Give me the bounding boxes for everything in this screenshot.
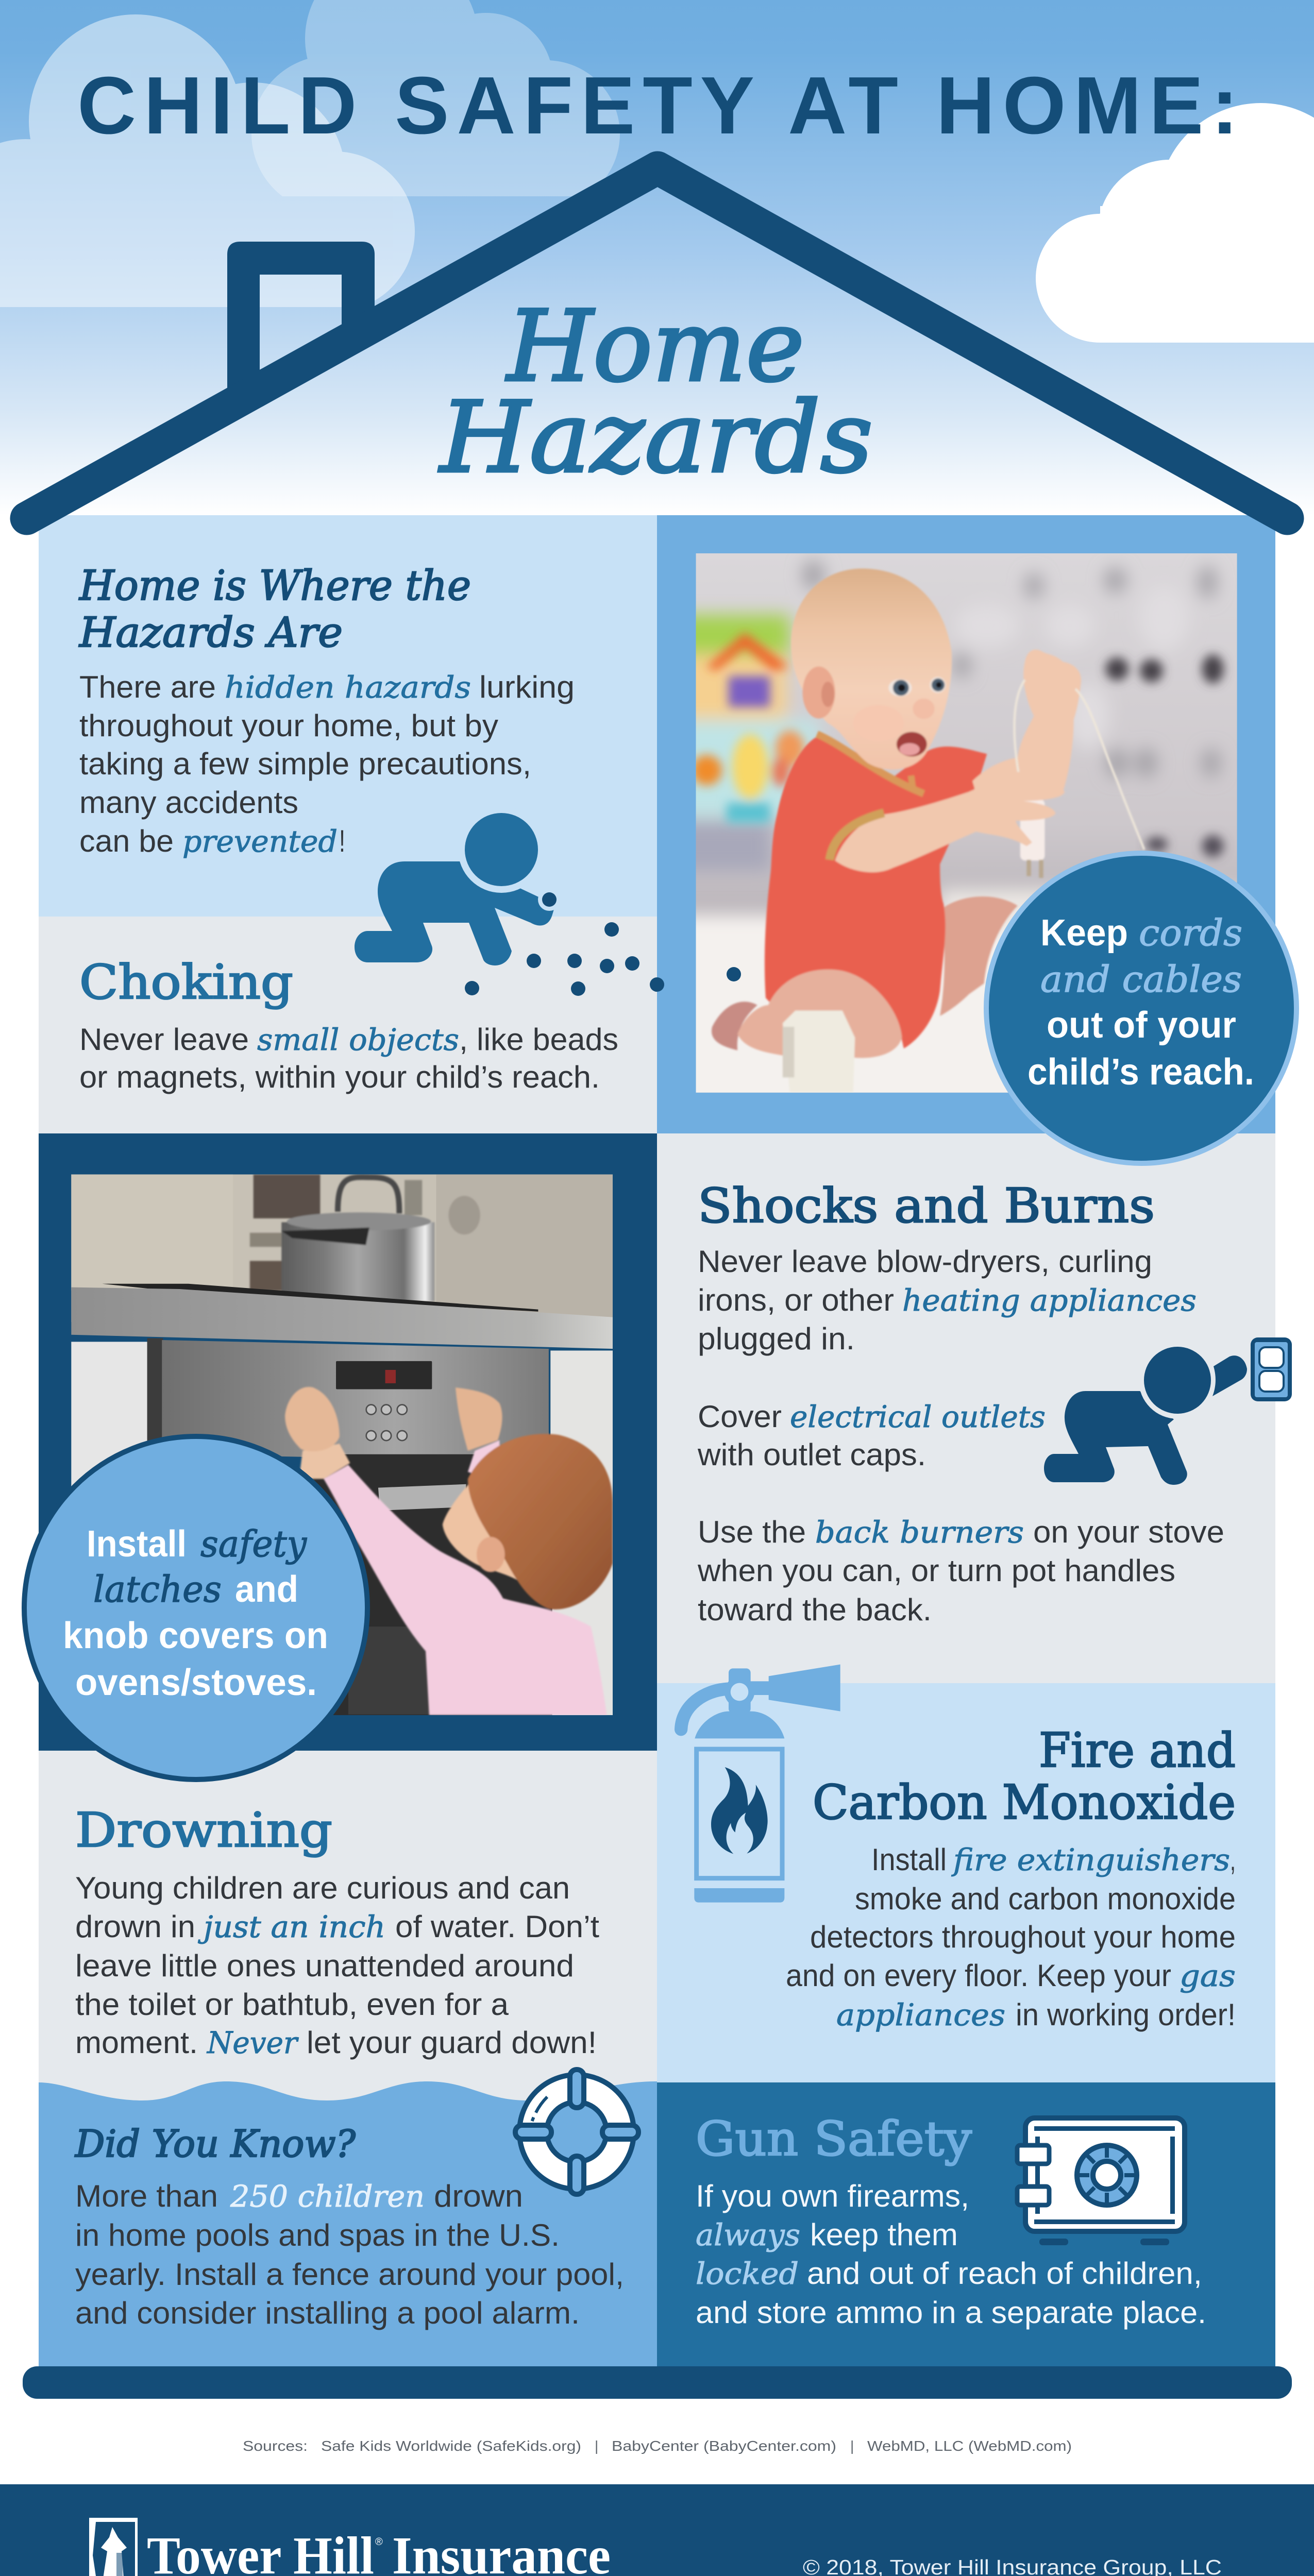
shocks body: plugged in. xyxy=(698,1321,855,1356)
choking heading: Choking xyxy=(79,955,293,1010)
shocks and burns text block xyxy=(697,1178,1224,1627)
shocks body: toward the back. xyxy=(698,1592,932,1627)
callout: safety latches: latches xyxy=(93,1568,222,1611)
gun safety text block xyxy=(696,2111,1206,2330)
fire body: , xyxy=(1230,1842,1236,1877)
fire text block xyxy=(786,1723,1236,2032)
callout: safety latches: knob covers on xyxy=(63,1615,328,1656)
choking body: or magnets, within your child’s reach. xyxy=(79,1060,600,1094)
drowning body: just an inch xyxy=(198,1909,385,1944)
did you know body: yearly. Install a fence around your pool, xyxy=(75,2257,624,2292)
did you know heading: Did You Know? xyxy=(74,2122,356,2165)
shocks body xyxy=(697,1244,1224,1627)
shocks body: heating appliances xyxy=(902,1283,1197,1318)
fire body: detectors throughout your home xyxy=(810,1920,1236,1954)
sources: WebMD, LLC (WebMD.com) xyxy=(867,2438,1072,2454)
fire body: in working order! xyxy=(1016,1997,1236,2032)
gun safety body xyxy=(696,2179,1206,2330)
choking body: small objects xyxy=(257,1022,459,1057)
photo: child at oven xyxy=(71,1175,613,1716)
callout: keep cords xyxy=(986,853,1296,1163)
gun safety body: locked xyxy=(696,2256,799,2291)
sources: | xyxy=(595,2438,598,2454)
logo: tower hill insurance xyxy=(89,2518,611,2576)
cloud: back left xyxy=(251,0,620,212)
callout: keep cords: child’s reach. xyxy=(1027,1052,1254,1093)
panel: drowning xyxy=(39,1751,657,2111)
intro text block xyxy=(78,562,575,859)
shocks body: when you can, or turn pot handles xyxy=(697,1553,1175,1588)
drowning heading: Drowning xyxy=(75,1803,332,1858)
did you know body: and consider installing a pool alarm. xyxy=(75,2296,580,2330)
drowning body: Young children are curious and can xyxy=(75,1871,570,1905)
fire body xyxy=(786,1842,1236,2032)
shocks body: Use the xyxy=(698,1515,806,1549)
gun safety body: and store ammo in a separate place. xyxy=(696,2295,1206,2330)
did you know body: 250 children xyxy=(230,2179,425,2214)
icon: safe xyxy=(1017,2118,1185,2245)
did you know body xyxy=(75,2179,624,2330)
footer band xyxy=(0,2484,1314,2576)
panel: shocks and burns xyxy=(657,1133,1275,1683)
intro body xyxy=(79,670,575,859)
did you know text block xyxy=(74,2122,624,2330)
drowning body: let your guard down! xyxy=(307,2025,597,2060)
fire heading xyxy=(813,1723,1236,1830)
sources xyxy=(243,2438,1072,2454)
gun safety body: always xyxy=(696,2217,800,2252)
shocks heading: Shocks and Burns xyxy=(698,1178,1155,1233)
intro body: can be xyxy=(79,824,174,858)
shocks body: Never leave blow-dryers, curling xyxy=(698,1244,1152,1279)
shocks body: Cover xyxy=(698,1399,782,1434)
panel: oven photo backing xyxy=(39,1133,657,1751)
drowning body: leave little ones unattended around xyxy=(75,1948,574,1983)
callout: safety latches: safety xyxy=(200,1523,307,1565)
fire body: smoke and carbon monoxide xyxy=(855,1882,1236,1916)
callout: keep cords: Keep xyxy=(1040,912,1128,954)
intro body: taking a few simple precautions, xyxy=(79,747,531,781)
sources: | xyxy=(850,2438,854,2454)
gun safety body: keep them xyxy=(810,2217,958,2252)
panel: baby photo backing xyxy=(657,515,1275,1133)
panel: intro xyxy=(39,515,657,917)
icon: fire extinguisher xyxy=(675,1664,840,1903)
intro body: hidden hazards xyxy=(225,670,471,705)
house floor bar xyxy=(23,2366,1292,2399)
subtitle: Home xyxy=(506,290,804,403)
subtitle xyxy=(439,290,873,495)
callout: keep cords: out of your xyxy=(1047,1005,1236,1046)
callout: keep cords: cords xyxy=(1139,912,1242,954)
callout: safety latches: ovens/stoves. xyxy=(75,1662,317,1703)
panel: choking xyxy=(39,917,657,1133)
fire body: and on every floor. Keep your xyxy=(786,1958,1171,1993)
choking text block xyxy=(79,955,618,1094)
icon: tower logo xyxy=(89,2518,138,2576)
panel: did you know water xyxy=(39,2081,657,2366)
icon: crawling baby with beads xyxy=(355,806,741,996)
intro heading: Home is Where the xyxy=(78,562,471,609)
intro heading xyxy=(78,562,471,656)
intro body: There are xyxy=(79,670,216,704)
sources: Safe Kids Worldwide (SafeKids.org) xyxy=(321,2438,581,2454)
panel: gun safety xyxy=(657,2082,1275,2366)
panel: fire and carbon monoxide xyxy=(657,1683,1275,2082)
fire body: Install xyxy=(871,1842,947,1877)
fire body: fire extinguishers xyxy=(951,1842,1230,1877)
gun safety heading: Gun Safety xyxy=(696,2111,972,2166)
cloud: white right xyxy=(1036,103,1314,343)
drowning body: drown in xyxy=(75,1909,195,1944)
shocks body: on your stove xyxy=(1033,1515,1224,1549)
intro body: many accidents xyxy=(79,785,298,820)
callout: keep cords: and cables xyxy=(1040,958,1242,1001)
title: CHILD SAFETY AT HOME: xyxy=(77,60,1238,151)
did you know body: drown xyxy=(434,2179,523,2213)
icon: crawling baby reaching for outlet xyxy=(1044,1337,1292,1485)
drowning body: moment. xyxy=(75,2025,198,2060)
drowning body: the toilet or bathtub, even for a xyxy=(75,1987,509,2022)
callout: safety latches xyxy=(24,1436,367,1780)
fire body: gas xyxy=(1180,1958,1236,1993)
roof and chimney xyxy=(27,168,1287,518)
intro body: prevented xyxy=(182,824,338,859)
sources: BabyCenter (BabyCenter.com) xyxy=(612,2438,836,2454)
subtitle: Hazards xyxy=(439,381,873,495)
icon: life ring xyxy=(515,2070,638,2194)
callout: safety latches: and xyxy=(235,1569,298,1610)
logo: tower hill insurance: ® xyxy=(375,2536,383,2548)
choking body: , like beads xyxy=(459,1022,618,1057)
drowning body xyxy=(75,1871,599,2060)
intro heading: Hazards Are xyxy=(78,608,343,656)
intro body: ! xyxy=(339,824,345,858)
gun safety body: If you own firearms, xyxy=(696,2179,969,2213)
shocks body: electrical outlets xyxy=(790,1399,1046,1434)
drowning body: Never xyxy=(206,2025,299,2060)
fire heading: Fire and xyxy=(1039,1723,1236,1778)
shocks body: back burners xyxy=(815,1515,1024,1550)
drowning body: of water. Don’t xyxy=(395,1909,599,1944)
drowning text block xyxy=(75,1803,599,2060)
did you know body: in home pools and spas in the U.S. xyxy=(75,2218,560,2252)
cloud: front left xyxy=(0,14,415,314)
intro body: throughout your home, but by xyxy=(79,708,498,743)
shocks body: with outlet caps. xyxy=(697,1437,926,1472)
fire heading: Carbon Monoxide xyxy=(813,1775,1236,1830)
photo: baby holding cord xyxy=(696,553,1237,1093)
choking body xyxy=(79,1022,618,1094)
gun safety body: and out of reach of children, xyxy=(807,2256,1202,2291)
intro body: lurking xyxy=(479,670,575,704)
fire body: appliances xyxy=(836,1997,1005,2032)
sky background xyxy=(0,0,1314,515)
sources: Sources: xyxy=(243,2438,308,2454)
shocks body: irons, or other xyxy=(698,1283,894,1317)
icon: wall outlet xyxy=(1251,1337,1292,1401)
callout: safety latches: Install xyxy=(87,1523,187,1565)
did you know body: More than xyxy=(75,2179,218,2213)
choking body: Never leave xyxy=(79,1022,249,1057)
